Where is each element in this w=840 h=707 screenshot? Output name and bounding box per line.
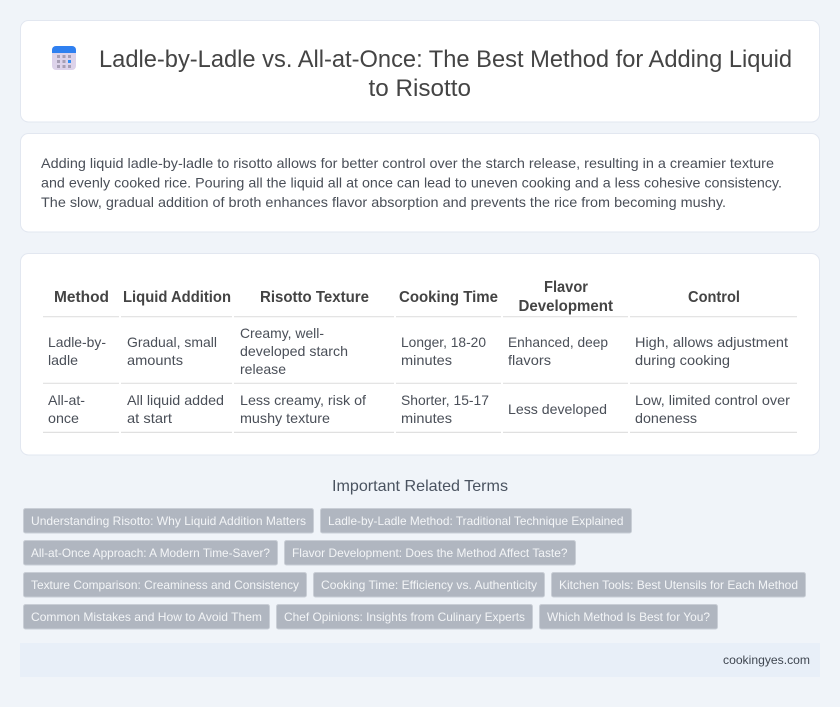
table header: Cooking Time: [399, 289, 498, 306]
tag: Cooking Time: Efficiency vs. Authenticity: [321, 578, 537, 592]
title: to Risotto: [368, 75, 471, 102]
table row: all-at-once: Low, limited control over: [635, 392, 790, 408]
table row: ladle-by-ladle: flavors: [508, 352, 551, 368]
table header: Risotto Texture: [260, 289, 369, 306]
table header: [54, 279, 740, 315]
table row: all-at-once: All-at-: [48, 392, 85, 408]
table row: ladle-by-ladle: during cooking: [635, 352, 730, 368]
table row: ladle-by-ladle: release: [240, 361, 286, 377]
table row: ladle-by-ladle: Creamy, well-: [240, 325, 324, 341]
table header: Development: [518, 298, 614, 315]
tag: [314, 572, 544, 597]
panel: title card: [20, 20, 820, 122]
heading: related terms: Important Related Terms: [332, 478, 508, 495]
table row: all-at-once: Less developed: [508, 401, 607, 417]
table row: ladle-by-ladle: Longer, 18-20: [401, 334, 486, 350]
table row: all-at-once: mushy texture: [240, 410, 330, 426]
table row: ladle-by-ladle: ladle: [48, 352, 78, 368]
title: [99, 46, 792, 102]
table row: all-at-once: minutes: [401, 410, 452, 426]
tag: [24, 508, 314, 533]
table row: ladle-by-ladle: Ladle-by-: [48, 334, 106, 350]
tag: [552, 572, 806, 597]
title: Ladle-by-Ladle vs. All-at-Once: The Best Method for Adding Liquid: [99, 46, 792, 73]
table row: ladle-by-ladle: [48, 325, 788, 377]
table row: all-at-once: at start: [127, 410, 172, 426]
table row: all-at-once: Shorter, 15-17: [401, 392, 489, 408]
tag: [24, 540, 278, 565]
tag: All-at-Once Approach: A Modern Time-Saver?: [31, 546, 270, 560]
tag: Which Method Is Best for You?: [547, 610, 710, 624]
footer: [20, 643, 820, 677]
table row: all-at-once: doneness: [635, 410, 697, 426]
table row: ladle-by-ladle: Gradual, small: [127, 334, 217, 350]
tag: [276, 604, 532, 629]
panel: description: [20, 134, 820, 232]
tag: Chef Opinions: Insights from Culinary Experts: [284, 610, 525, 624]
tag: [284, 540, 576, 565]
description text: The slow, gradual addition of broth enhances flavor absorption and prevents the rice from becoming mushy.: [41, 194, 726, 210]
tag: Flavor Development: Does the Method Affect Taste?: [292, 546, 568, 560]
table row: ladle-by-ladle: developed starch: [240, 343, 348, 359]
table header: Liquid Addition: [123, 289, 231, 306]
tag: Understanding Risotto: Why Liquid Addition Matters: [31, 514, 306, 528]
tag: [540, 604, 718, 629]
table row: ladle-by-ladle: High, allows adjustment: [635, 334, 788, 350]
table row: all-at-once: All liquid added: [127, 392, 224, 408]
table row: all-at-once: [48, 392, 790, 426]
table row: ladle-by-ladle: minutes: [401, 352, 452, 368]
table header: Method: [54, 289, 109, 306]
related term tags: [24, 508, 806, 629]
table header: Control: [688, 289, 740, 306]
description text: and evenly cooked rice. Pouring all the liquid all at once can lead to uneven cooking and a less cohesive consistency.: [41, 174, 782, 190]
icon: calendar: [52, 46, 76, 70]
tag: Ladle-by-Ladle Method: Traditional Technique Explained: [328, 514, 624, 528]
description text: [41, 155, 782, 210]
tag: [24, 604, 270, 629]
table row: ladle-by-ladle: amounts: [127, 352, 183, 368]
panel: comparison table: [20, 254, 820, 455]
tag: Kitchen Tools: Best Utensils for Each Method: [559, 578, 798, 592]
table header: Flavor: [544, 279, 588, 296]
tag: Texture Comparison: Creaminess and Consistency: [31, 578, 299, 592]
footer: cookingyes.com: [723, 653, 810, 667]
description text: Adding liquid ladle-by-ladle to risotto allows for better control over the starch release, resulting in a creamier texture: [41, 155, 774, 171]
table row: all-at-once: Less creamy, risk of: [240, 392, 366, 408]
table row: all-at-once: once: [48, 410, 79, 426]
tag: Common Mistakes and How to Avoid Them: [31, 610, 262, 624]
tag: [24, 572, 306, 597]
tag: [320, 508, 632, 533]
table row: ladle-by-ladle: Enhanced, deep: [508, 334, 608, 350]
